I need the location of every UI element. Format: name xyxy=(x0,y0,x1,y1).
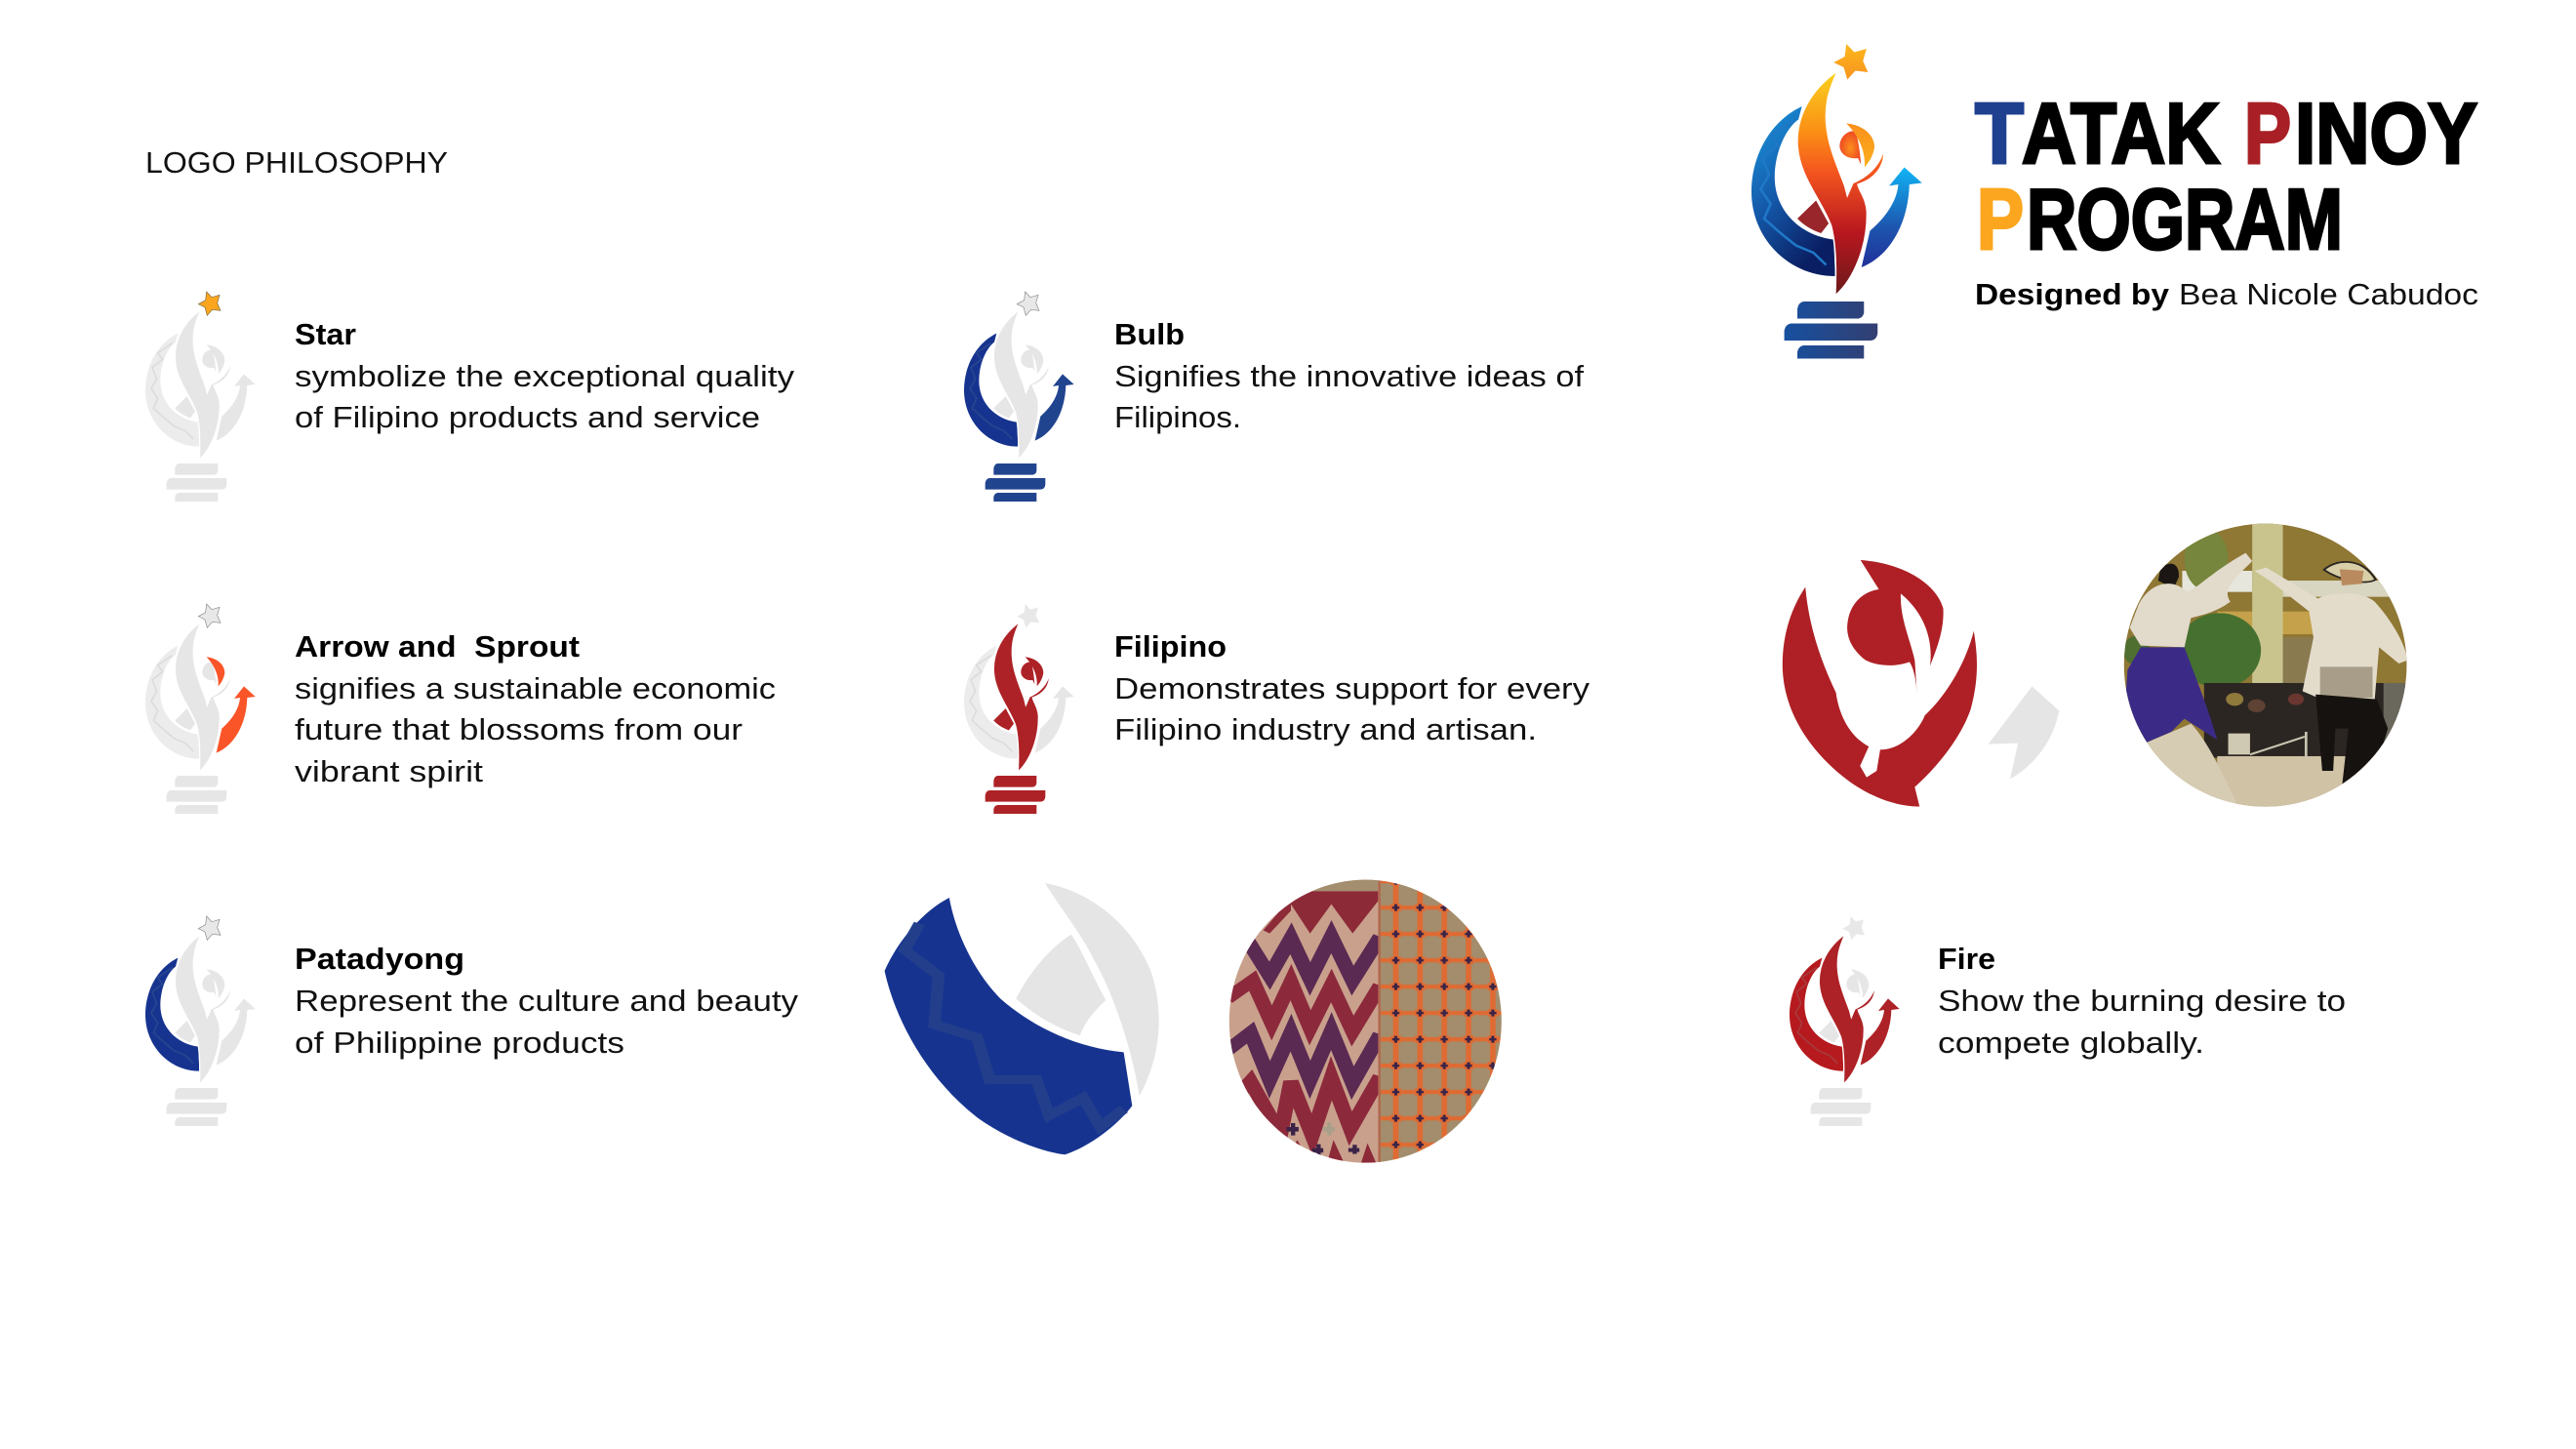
text: patadyong: of Philippine products xyxy=(295,1026,624,1060)
text: bulb xyxy=(1114,317,1584,434)
text: arrow and sprout: Arrow and Sprout xyxy=(295,629,580,664)
text: arrow and sprout: signifies a sustainable economic xyxy=(295,671,776,705)
title: tatak pinoy program: T xyxy=(1975,85,2024,181)
designer credit: Bea Nicole Cabudoc xyxy=(2179,277,2478,311)
icon: enlarged filipino figure xyxy=(1783,560,2059,807)
text: fire: Fire xyxy=(1938,942,1995,976)
title: tatak pinoy program: P xyxy=(1977,171,2024,267)
panel: arrow and sprout xyxy=(145,604,776,814)
text: star: Star xyxy=(295,317,356,351)
text: patadyong: Patadyong xyxy=(295,942,464,976)
text: star: symbolize the exceptional quality xyxy=(295,359,795,393)
text: filipino: Demonstrates support for every xyxy=(1114,671,1590,705)
text: star: of Filipino products and service xyxy=(295,400,760,434)
text: bulb: Bulb xyxy=(1114,317,1185,351)
text: arrow and sprout: future that blossoms from our xyxy=(295,712,743,746)
title: tatak pinoy program: ATAK xyxy=(2022,85,2220,181)
title: tatak pinoy program: ROGRAM xyxy=(2027,171,2343,267)
text: fire: compete globally. xyxy=(1938,1026,2204,1060)
title: tatak pinoy program: INOY xyxy=(2295,85,2477,181)
designer credit xyxy=(1975,277,2478,311)
designer credit: Designed by xyxy=(1975,277,2170,311)
panel: filipino xyxy=(964,604,1590,814)
text: bulb: Signifies the innovative ideas of xyxy=(1114,359,1584,393)
text: arrow and sprout xyxy=(295,629,776,788)
icon: logo with patadyong highlighted xyxy=(145,916,256,1126)
title: tatak pinoy program xyxy=(1975,85,2477,267)
icon: logo with bulb highlighted xyxy=(964,292,1074,502)
heading: logo philosophy: LOGO PHILOSOPHY xyxy=(145,145,448,180)
icon: logo with arrow and sprout highlighted xyxy=(145,604,256,814)
text: star xyxy=(295,317,795,434)
panel: star xyxy=(145,292,795,502)
title: tatak pinoy program: P xyxy=(2244,85,2291,181)
text: fire: Show the burning desire to xyxy=(1938,984,2346,1018)
text: filipino xyxy=(1114,629,1590,746)
text: filipino: Filipino xyxy=(1114,629,1227,664)
image: folk dancers photo xyxy=(2121,520,2414,810)
text: filipino: Filipino industry and artisan. xyxy=(1114,712,1537,746)
icon: enlarged patadyong crescent xyxy=(885,883,1159,1154)
image: patadyong textile xyxy=(1223,878,1512,1164)
icon: logo with star highlighted xyxy=(145,292,256,502)
panel: fire xyxy=(1790,916,2346,1126)
panel: bulb xyxy=(964,292,1584,502)
text: arrow and sprout: vibrant spirit xyxy=(295,754,483,788)
text: patadyong xyxy=(295,942,799,1060)
icon: logo with figure highlighted xyxy=(964,604,1074,814)
full colour logo xyxy=(1751,44,1922,359)
text: fire xyxy=(1938,942,2346,1060)
text: bulb: Filipinos. xyxy=(1114,400,1241,434)
panel: patadyong xyxy=(145,916,799,1126)
text: patadyong: Represent the culture and beauty xyxy=(295,984,799,1018)
icon: logo with fire highlighted xyxy=(1790,916,1900,1126)
